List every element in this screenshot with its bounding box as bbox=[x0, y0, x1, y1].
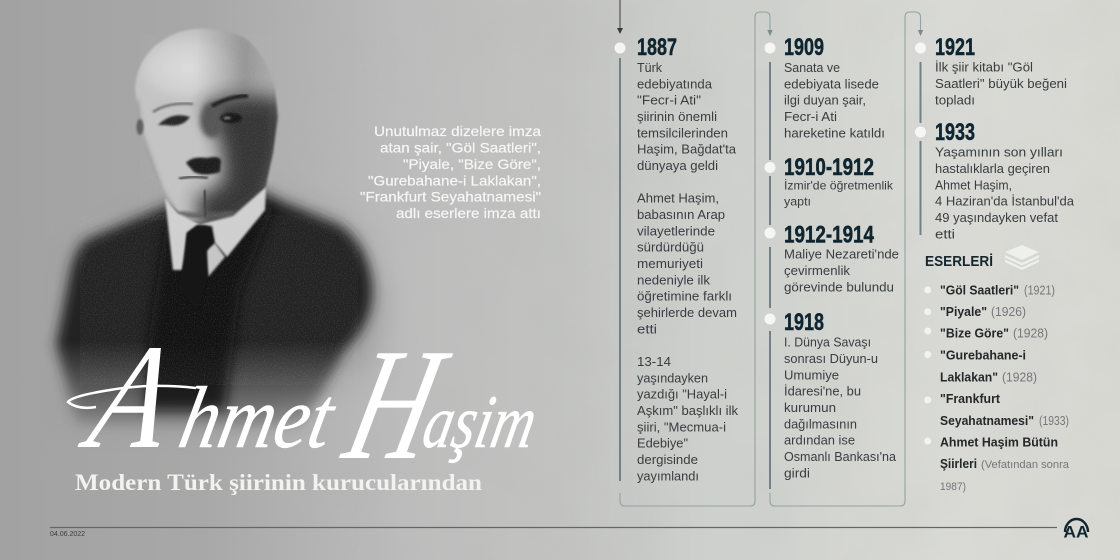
column 2: 1909: edebiyata lisede bbox=[784, 76, 879, 91]
column 1: 1887: etti bbox=[637, 321, 657, 336]
portrait: shaded right of face bbox=[196, 97, 285, 230]
column 3: 1921: Saatleri" büyük beğeni bbox=[935, 76, 1067, 91]
timeline connectors and frames bbox=[617, 0, 923, 506]
portrait: right eye bbox=[220, 113, 242, 123]
column 3: 1933: 4 Haziran'da İstanbul'da bbox=[935, 194, 1075, 209]
works list bullets bbox=[924, 286, 931, 444]
works list: Şiirleri bbox=[940, 456, 977, 471]
column 2: 1918: Umumiye bbox=[784, 367, 839, 382]
column 2: 1918: sonrası Düyun-u bbox=[784, 351, 878, 366]
column 2: 1918: ardından ise bbox=[784, 433, 855, 448]
footer rule bbox=[50, 526, 1057, 528]
column 2: 1909: 1909 bbox=[784, 34, 824, 61]
portrait: left ear bbox=[136, 119, 144, 135]
works list: Ahmet Haşim Bütün bbox=[940, 434, 1058, 450]
logo: AA: AA bbox=[1064, 522, 1088, 542]
column 2: 1909 bbox=[784, 34, 885, 140]
portrait: face base bbox=[134, 28, 274, 224]
column 2: 1910-1912: İzmir'de öğretmenlik bbox=[784, 178, 894, 192]
column 1: 1887: şiiri, "Mecmua-i bbox=[637, 419, 726, 434]
column 1: 1887: temsilcilerinden bbox=[637, 125, 728, 140]
portrait: collar bbox=[165, 187, 266, 270]
column 1: 1887: memuriyeti bbox=[637, 256, 703, 271]
portrait: chin shadow bbox=[178, 212, 235, 217]
column 2: 1910-1912 bbox=[784, 154, 894, 208]
column 2: 1918: 1918 bbox=[784, 309, 824, 336]
column 2: 1918: I. Dünya Savaşı bbox=[784, 335, 871, 350]
column 3: 1933: 1933 bbox=[935, 119, 975, 146]
portrait: suit grain bbox=[80, 215, 358, 385]
column 1: 1887: nedeniyle ilk bbox=[637, 272, 711, 287]
column 1: 1887: "Fecr-i Ati" bbox=[637, 93, 701, 108]
portrait: tie bbox=[178, 226, 213, 310]
intro text block: "Gurebahane-i Laklakan", bbox=[368, 172, 541, 188]
works list: "Frankfurt bbox=[940, 391, 1001, 406]
column 2: 1918: Osmanlı Bankası'na bbox=[784, 449, 897, 464]
column 3: 1921: topladı bbox=[935, 92, 975, 107]
works list: Laklakan" bbox=[940, 370, 998, 384]
column 1: 1887: öğretimine farklı bbox=[637, 289, 732, 304]
column 2: 1918: kurumun bbox=[784, 400, 836, 415]
column 2: 1918: dağılmasının bbox=[784, 416, 857, 431]
works heading: ESERLERİ bbox=[925, 253, 993, 270]
column 1: 1887: edebiyatında bbox=[637, 76, 713, 91]
portrait: inner dark jacket bbox=[145, 205, 275, 410]
portrait: left face edge bbox=[135, 100, 172, 210]
portrait: soft shadow halo bbox=[70, 200, 385, 425]
title: name bbox=[68, 313, 544, 493]
column 1: 1887: dergisinde bbox=[637, 452, 698, 467]
portrait: right brow bbox=[212, 96, 248, 106]
works list bbox=[924, 282, 1070, 493]
column 1: 1887: 13-14 bbox=[637, 354, 671, 369]
works list: "Gurebahane-i bbox=[940, 348, 1026, 362]
column 1: 1887: dünyaya geldi bbox=[637, 158, 718, 173]
column 2: 1918: girdi bbox=[784, 465, 810, 480]
column 1: 1887: Aşkım" başlıklı ilk bbox=[637, 403, 739, 418]
column 2: 1909: ilgi duyan şair, bbox=[784, 93, 866, 108]
column 2: 1912-1914: Maliye Nezareti'nde bbox=[784, 247, 899, 262]
portrait: forehead right shading bbox=[202, 30, 276, 107]
column 1: 1887: babasının Arap bbox=[637, 207, 725, 222]
column 3: 1921: İlk şiir kitabı "Göl bbox=[935, 60, 1033, 75]
column 3: 1933: Ahmet Haşim, bbox=[935, 177, 1012, 192]
column 1: 1887 bbox=[637, 34, 739, 483]
works list: 1987) bbox=[940, 481, 966, 493]
column 3: 1933: Yaşamının son yılları bbox=[935, 145, 1063, 160]
column 3: 1921: 1921 bbox=[935, 34, 975, 61]
intro text block: atan şair, "Göl Saatleri", bbox=[380, 140, 541, 156]
portrait: face grain bbox=[140, 34, 272, 220]
column 2: 1918 bbox=[784, 309, 897, 480]
intro text block: "Frankfurt Seyahatnamesi" bbox=[360, 188, 541, 204]
intro text block bbox=[360, 123, 541, 221]
column 1: 1887: şehirlerde devam bbox=[637, 305, 737, 320]
column 3: 1921 bbox=[935, 34, 1067, 107]
title flourish: A swash bbox=[68, 386, 196, 408]
column 1: 1887: yaşındayken bbox=[637, 370, 708, 385]
title: name: A bbox=[69, 313, 192, 479]
column 2: 1912-1914: çevirmenlik bbox=[784, 263, 851, 278]
intro text block: Unutulmaz dizelere imza bbox=[374, 123, 541, 139]
column 3: 1933 bbox=[935, 119, 1075, 241]
column 1: 1887: sürdürdüğü bbox=[637, 240, 704, 255]
portrait: moustache bbox=[186, 157, 221, 174]
column 2: 1912-1914: görevinde bulundu bbox=[784, 280, 894, 294]
column 1: 1887: vilayetlerinde bbox=[637, 223, 715, 238]
subtitle: Modern Türk şiirinin kurucularından bbox=[75, 470, 482, 495]
intro text block: adlı eserlere imza attı bbox=[396, 205, 541, 221]
column 1: 1887: Ahmet Haşim, bbox=[637, 191, 719, 206]
portrait photograph bbox=[56, 25, 385, 430]
works list: "Bize Göre" bbox=[940, 326, 1009, 340]
works list: (1921) bbox=[1024, 283, 1055, 297]
column 3: 1933: 49 yaşındayken vefat bbox=[935, 210, 1058, 225]
column 1: 1887: Türk bbox=[637, 60, 662, 75]
portrait: collar right flap bbox=[207, 243, 225, 277]
column 2: 1909: Sanata ve bbox=[784, 60, 840, 75]
column 1: 1887: 1887 bbox=[637, 34, 677, 61]
column 2: 1912-1914 bbox=[784, 222, 899, 294]
column 3: 1933: hastalıklarla geçiren bbox=[935, 161, 1050, 176]
column 1: 1887: Edebiye" bbox=[637, 436, 688, 451]
column 2: 1912-1914: 1912-1914 bbox=[784, 222, 875, 248]
column 1: 1887: yazdığı "Hayal-i bbox=[637, 387, 727, 402]
portrait: suit bbox=[56, 190, 372, 430]
column 2: 1909: Fecr-i Ati bbox=[784, 109, 837, 124]
column 1: 1887: Haşim, Bağdat'ta bbox=[637, 142, 737, 157]
works list: (1933) bbox=[1039, 414, 1069, 428]
title: name: hmet bbox=[172, 370, 344, 467]
works list: (Vefatından sonra bbox=[981, 459, 1070, 471]
column 1: 1887: yayımlandı bbox=[637, 468, 699, 483]
timeline bullets bbox=[614, 42, 926, 324]
title: name: H bbox=[330, 316, 463, 493]
column 3: 1933: etti bbox=[935, 226, 955, 241]
portrait: forehead highlight bbox=[146, 40, 228, 96]
works list: (1928) bbox=[1013, 326, 1048, 340]
works list: (1928) bbox=[1002, 370, 1037, 384]
portrait: mouth bbox=[179, 177, 208, 179]
column 2: 1910-1912: yaptı bbox=[784, 194, 811, 208]
portrait: shadow between brows bbox=[200, 102, 224, 138]
portrait: head bbox=[134, 28, 280, 224]
intro text block: "Piyale, "Bize Göre", bbox=[403, 156, 541, 172]
portrait: left brow bbox=[153, 104, 193, 112]
column 2: 1909: hareketine katıldı bbox=[784, 125, 885, 140]
portrait: left eye bbox=[158, 115, 190, 126]
date: 04.06.2022 bbox=[50, 531, 85, 538]
works list: "Piyale" bbox=[940, 304, 987, 319]
portrait: eye glint bbox=[223, 116, 231, 120]
portrait: chin mark bbox=[204, 190, 206, 217]
column 2: 1918: İdaresi'ne, bu bbox=[784, 384, 861, 399]
icon: stack of books bbox=[1005, 245, 1039, 270]
title: name: aşim bbox=[416, 380, 544, 464]
works list: (1926) bbox=[991, 305, 1026, 319]
works list: "Göl Saatleri" bbox=[940, 282, 1019, 297]
column 2: 1910-1912: 1910-1912 bbox=[784, 154, 874, 181]
column 1: 1887: şiirinin önemli bbox=[637, 109, 717, 124]
works list: Seyahatnamesi" bbox=[940, 413, 1034, 428]
